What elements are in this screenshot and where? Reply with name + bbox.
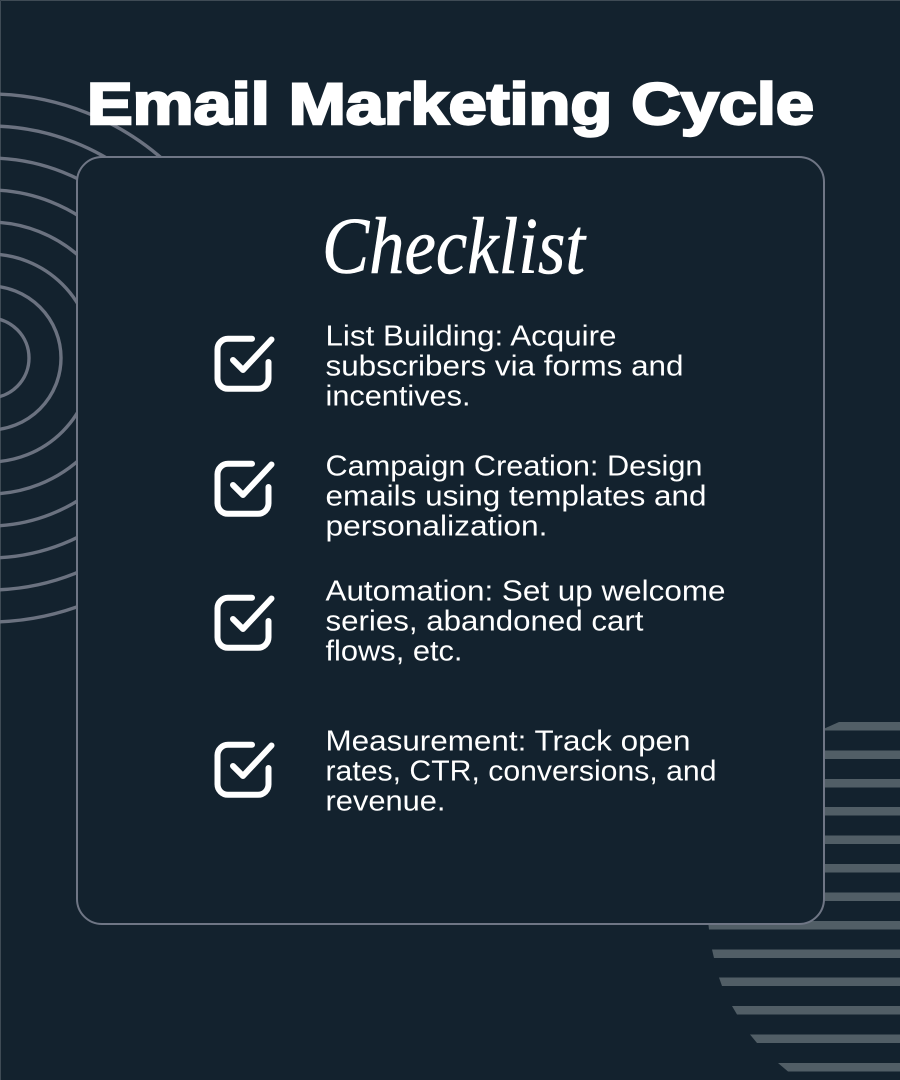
text: automation: series, abandoned cart bbox=[326, 606, 644, 638]
text: campaign creation: Campaign Creation: Design bbox=[326, 450, 702, 482]
text: measurement: rates, CTR, conversions, and bbox=[326, 756, 716, 788]
text: automation bbox=[326, 576, 726, 668]
text: list building: List Building: Acquire bbox=[326, 320, 616, 352]
heading: checklist: Checklist bbox=[322, 203, 587, 291]
panel: checklist bbox=[77, 157, 824, 924]
text: automation: flows, etc. bbox=[326, 636, 462, 668]
text: measurement bbox=[326, 726, 716, 818]
text: list building: subscribers via forms and bbox=[326, 350, 684, 382]
concentric arcs decoration bbox=[0, 94, 253, 622]
text: measurement: Measurement: Track open bbox=[326, 726, 690, 758]
title: Email Marketing Cycle bbox=[87, 72, 814, 137]
text: list building: incentives. bbox=[326, 380, 470, 412]
icon: checkbox 3 bbox=[218, 598, 272, 648]
icon: checkbox 4 bbox=[218, 745, 272, 795]
panel background bbox=[77, 157, 824, 924]
text: campaign creation: personalization. bbox=[326, 510, 548, 542]
text: automation: Automation: Set up welcome bbox=[326, 576, 726, 608]
icon: checkbox 1 bbox=[218, 339, 272, 389]
striped semicircle decoration bbox=[708, 722, 900, 1072]
icon: checkbox 2 bbox=[218, 464, 272, 514]
text: measurement: revenue. bbox=[326, 786, 446, 818]
text: list building bbox=[326, 320, 684, 412]
text: campaign creation bbox=[326, 450, 706, 542]
text: campaign creation: emails using templates and bbox=[326, 480, 706, 512]
